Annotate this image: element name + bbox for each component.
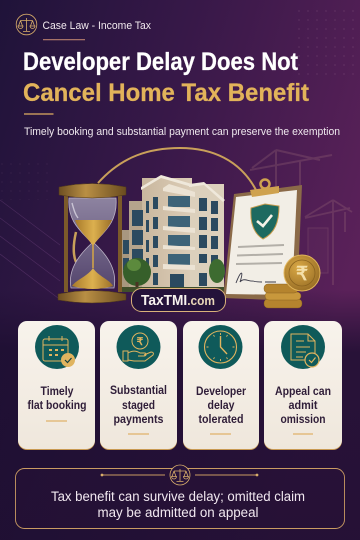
card: substantial staged payments: ₹ (137, 336, 144, 348)
clip (250, 186, 279, 197)
card: appeal can admit omission: omission (280, 412, 326, 426)
icon: scales small (170, 465, 190, 485)
illustration: hourglass (58, 184, 126, 303)
card: timely flat booking (18, 321, 95, 450)
faded construction cranes (250, 150, 352, 285)
card: developer delay tolerated: tolerated (198, 412, 244, 426)
card: timely flat booking: flat booking (28, 398, 86, 412)
icon: scales of justice (16, 14, 37, 35)
header: category label: Case Law - Income Tax (42, 20, 151, 32)
illustration: apartment building (120, 175, 225, 292)
icon: clock (204, 331, 236, 363)
card: appeal can admit omission: Appeal can (275, 384, 331, 398)
card: appeal can admit omission (264, 321, 342, 450)
card: substantial staged payments: payments (114, 412, 164, 426)
card: developer delay tolerated: delay (208, 398, 235, 412)
header: category label (16, 14, 151, 40)
gold divider (24, 113, 54, 115)
conclusion panel: Tax benefit can survive delay; omitted claim (51, 489, 305, 504)
card: substantial staged payments: Substantial (110, 383, 167, 397)
card: substantial staged payments: staged (122, 398, 155, 412)
card: developer delay tolerated: Developer (196, 384, 246, 398)
title: Cancel Home Tax Benefit (23, 79, 310, 107)
signature (236, 273, 276, 283)
illustration arc (98, 148, 256, 190)
icon: document with check (291, 334, 319, 367)
icon: shield check (251, 204, 279, 239)
title: Developer Delay Does Not (23, 48, 299, 76)
illustration: clipboard with shield (223, 180, 302, 301)
conclusion panel (16, 465, 344, 528)
badge: TaxTMI.com: TaxTMI.com (141, 292, 215, 309)
trees (123, 258, 151, 286)
icon: calendar (43, 336, 74, 366)
subtitle: Timely booking and substantial payment can preserve the exemption (24, 126, 340, 138)
badge: TaxTMI.com (132, 288, 226, 312)
illustration: coins and rupee: ₹ (296, 264, 308, 285)
card: appeal can admit omission: admit (288, 398, 318, 412)
illustration: coins and rupee (264, 255, 320, 308)
conclusion panel: may be admitted on appeal (98, 505, 259, 520)
icon: hand with rupee (123, 333, 153, 361)
card: developer delay tolerated (183, 321, 259, 450)
card: timely flat booking: Timely (40, 384, 74, 398)
title (23, 48, 310, 107)
card: substantial staged payments (100, 321, 177, 450)
